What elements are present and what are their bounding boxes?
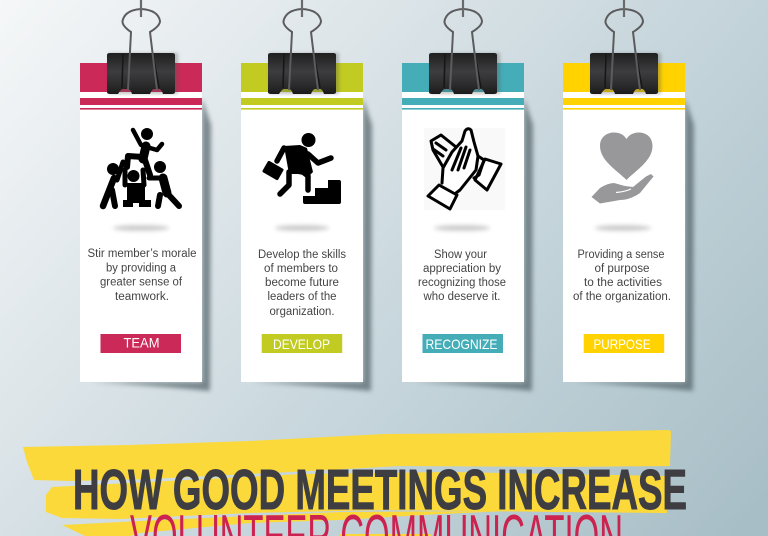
text: develop description: of members to — [264, 263, 338, 275]
text: purpose description: Providing a sense — [578, 249, 664, 261]
text: recognize description: who deserve it. — [423, 291, 500, 303]
text: team description — [88, 248, 196, 303]
label: develop — [262, 334, 342, 353]
icon shadow — [595, 225, 651, 231]
label: recognize: RECOGNIZE — [426, 336, 498, 352]
label: team — [100, 334, 181, 353]
icon: binder clip — [107, 0, 178, 94]
text: develop description: become future — [265, 277, 339, 289]
text: purpose description: of purpose — [594, 263, 650, 275]
panel: develop card — [241, 0, 372, 391]
text: team description: by providing a — [106, 262, 177, 274]
icon: binder clip — [268, 0, 339, 94]
text: develop description: Develop the skills — [258, 249, 346, 261]
label: team: TEAM — [124, 334, 160, 350]
text: purpose description — [573, 249, 671, 303]
panel: team card — [80, 0, 211, 391]
text: recognize description — [418, 249, 506, 303]
text: recognize description: recognizing those — [418, 277, 506, 289]
text: develop description: organization. — [270, 306, 334, 318]
text: purpose description: to the activities — [584, 277, 662, 289]
label: purpose: PURPOSE — [594, 336, 650, 352]
icon: heart in hand — [592, 132, 654, 204]
text: develop description — [258, 249, 346, 318]
text: recognize description: appreciation by — [423, 263, 501, 275]
text: purpose description: of the organization. — [573, 291, 671, 303]
icon shadow — [113, 225, 169, 231]
icon: binder clip — [429, 0, 500, 94]
text: team description: Stir member’s morale — [88, 248, 196, 260]
text: team description: teamwork. — [115, 291, 169, 303]
icon shadow — [275, 225, 329, 231]
icon: binder clip — [590, 0, 661, 94]
icon: clapping hands — [424, 128, 505, 210]
text: develop description: leaders of the — [268, 291, 336, 303]
icon: climbing stairs — [262, 133, 341, 204]
text: team description: greater sense of — [100, 276, 183, 288]
title brush strokes — [23, 430, 671, 536]
icon shadow — [434, 225, 490, 231]
text: recognize description: Show your — [434, 249, 487, 261]
panel: purpose card — [563, 0, 694, 391]
label: develop: DEVELOP — [273, 336, 330, 352]
panel: recognize card — [402, 0, 533, 391]
icon: team climbing — [103, 128, 179, 207]
